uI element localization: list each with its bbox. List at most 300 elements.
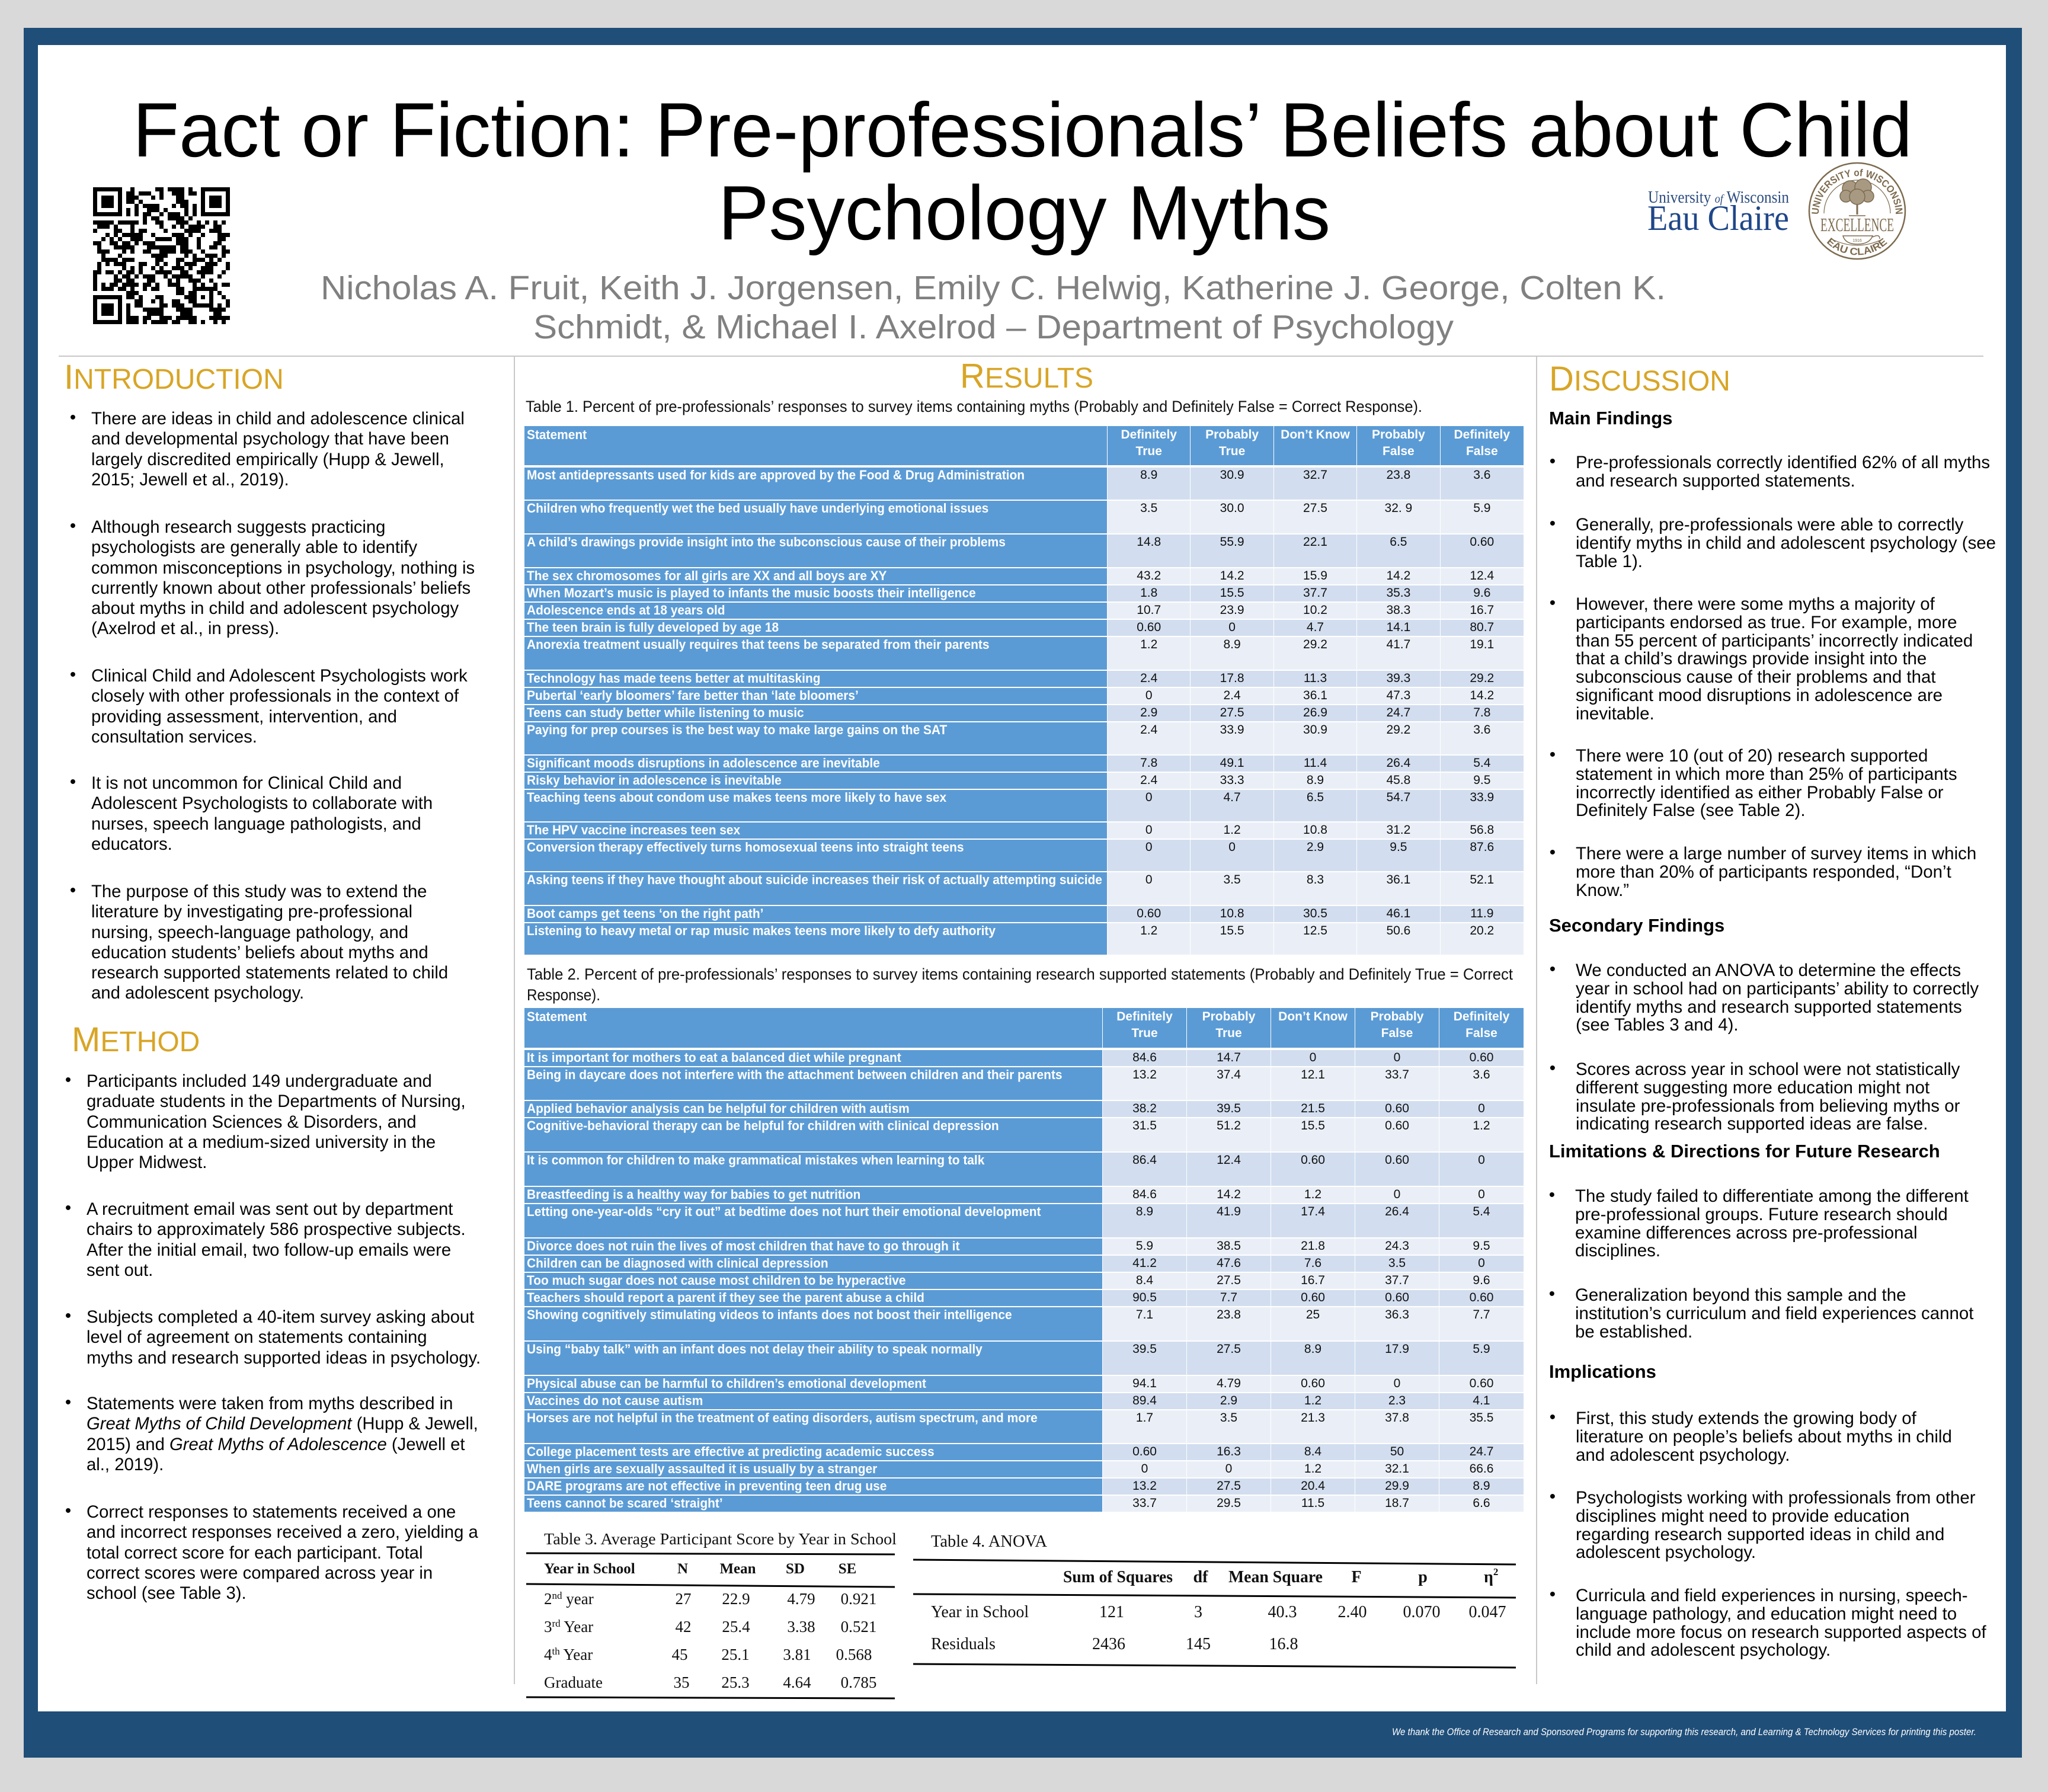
bullet: curricula: child and adolescent psychology. <box>1576 1640 1831 1660</box>
table 2: research supported statements: 38.5 <box>1217 1239 1241 1253</box>
table 2: research supported statements: It is important for mothers to eat a balanced diet while pregnant <box>527 1050 901 1065</box>
bullet: curricula: include more focus on research supported aspects of <box>1576 1623 1986 1642</box>
bullet: generalization: be established. <box>1575 1322 1692 1342</box>
table 2: research supported statements: Too much sugar does not cause most children to be hyperactive <box>527 1273 906 1288</box>
table 2: research supported statements: 27.5 <box>1217 1273 1241 1287</box>
logo: University of Wisconsin Eau Claire wordmark: University of Wisconsin <box>1648 188 1789 207</box>
bullet: endorsed myths: inevitable. <box>1576 704 1655 724</box>
bullet: collaboration <box>91 773 433 855</box>
table 2: research supported statements: 3.6 <box>1473 1068 1490 1081</box>
table 1: myths: 50.6 <box>1386 924 1410 937</box>
table 1: myths: 1.2 <box>1223 823 1241 837</box>
table 3: average participant score by year in school: Graduate <box>544 1673 603 1691</box>
table 1: myths: 1.2 <box>1140 924 1157 937</box>
bullet: survey: level of agreement on statements containing <box>87 1327 427 1347</box>
table 1: myths: 30.9 <box>1303 723 1327 737</box>
bullet: supported statements: statement in which more than 25% of participants <box>1576 764 1957 784</box>
title: Fact or Fiction: Pre-professionals’ Beliefs about Child <box>133 87 1912 173</box>
table 2: research supported statements: 21.5 <box>1301 1102 1325 1115</box>
table 2: research supported statements: 16.3 <box>1217 1445 1241 1458</box>
table 2: research supported statements: 11.5 <box>1301 1496 1324 1510</box>
table 2: research supported statements: Breastfeeding is a healthy way for babies to get nutrition <box>527 1187 860 1202</box>
bullet: statement sources: Great Myths of Child Development (Hupp & Jewell, <box>87 1414 478 1433</box>
bullet: supported statements: There were 10 (out of 20) research supported <box>1576 746 1928 766</box>
table 1: myths: 22.1 <box>1303 535 1327 549</box>
table 1: myths: 17.8 <box>1220 671 1244 685</box>
table 1: myths: 14.2 <box>1220 569 1244 583</box>
panel: method <box>66 1020 481 1603</box>
table 1: myths: 49.1 <box>1220 756 1244 770</box>
table 3: average participant score by year in school: Table 3. Average Participant Score by Year in School <box>544 1530 897 1548</box>
table 1: myths: 3.6 <box>1473 468 1490 482</box>
table 1: myths: Asking teens if they have thought about suicide increases their risk of actually attempting suicide <box>527 872 1102 887</box>
table 2: research supported statements: 0 <box>1225 1462 1232 1476</box>
table 3: average participant score by year in school: year <box>562 1590 594 1608</box>
table 1: myths: 9.5 <box>1473 773 1490 787</box>
table 1: myths: 87.6 <box>1470 840 1494 854</box>
table 1: myths: 15.5 <box>1220 924 1244 937</box>
table 1: myths: 2.4 <box>1140 773 1157 787</box>
table 1: myths: 2.9 <box>1307 840 1324 854</box>
table 3: average participant score by year in school: 22.9 <box>722 1590 750 1608</box>
table 2: research supported statements: Teens cannot be scared ‘straight’ <box>527 1496 723 1511</box>
table 1: myths: 0.60 <box>1137 620 1161 634</box>
bullet: 62 percent: Pre-professionals correctly identified 62% of all myths <box>1576 453 1990 472</box>
bullet: participants: Communication Sciences & Disorders, and <box>87 1112 417 1132</box>
bullet: don't know responses: more than 20% of participants responded, “Don’t <box>1576 862 1951 882</box>
icon: university seal: EAU CLAIRE <box>1826 238 1887 255</box>
table 1: myths: 19.1 <box>1470 638 1494 651</box>
table 3: average participant score by year in school: 25.3 <box>721 1673 750 1691</box>
bullet: psychologists provide education: regarding research supported ideas in child and <box>1576 1525 1944 1544</box>
table 1: myths: 0 <box>1145 823 1153 837</box>
table 3: average participant score by year in school: 3.38 <box>787 1618 815 1636</box>
tree crown and trunk <box>1840 179 1874 216</box>
table 2: research supported statements: Probably <box>1371 1010 1423 1023</box>
bullet: participants: Participants included 149 undergraduate and <box>87 1071 432 1091</box>
bullet: participants <box>87 1071 466 1173</box>
table 1: myths: 31.2 <box>1386 823 1410 837</box>
bullet: recruitment: chairs to approximately 586 prospective subjects. <box>87 1220 466 1239</box>
table 1: myths: 2.9 <box>1140 706 1157 719</box>
table 2: research supported statements: 0 <box>1478 1256 1485 1270</box>
table 2: research supported statements <box>524 1008 1524 1512</box>
table 2: research supported statements: 0.60 <box>1301 1377 1325 1390</box>
table 3: average participant score by year in school: 35 <box>673 1673 690 1691</box>
table 2: research supported statements: 1.7 <box>1136 1411 1153 1425</box>
table 1: myths: 15.5 <box>1220 586 1244 600</box>
bullet: recruitment: A recruitment email was sent out by department <box>87 1199 453 1219</box>
table 1: myths: 0 <box>1145 791 1153 804</box>
table 2: research supported statements: Cognitive-behavioral therapy can be helpful for children with clinical depression <box>527 1118 999 1133</box>
bullet: year in school scores: insulate pre-professionals from believing myths or <box>1576 1096 1960 1116</box>
bullet: participants: graduate students in the Departments of Nursing, <box>87 1092 466 1111</box>
table 2: research supported statements: 8.4 <box>1136 1273 1153 1287</box>
bullet: collaboration: educators. <box>91 834 172 854</box>
table 2: research supported statements: 29.5 <box>1217 1496 1241 1510</box>
table 1: myths: 33.9 <box>1470 791 1494 804</box>
bullet: correctly identify myths: identify myths in child and adolescent psychology (see <box>1576 533 1996 553</box>
bullet: endorsed myths: participants endorsed as true. For example, more <box>1576 613 1957 632</box>
table 1: myths: 11.3 <box>1304 671 1327 685</box>
table 2: research supported statements: 12.4 <box>1217 1153 1241 1167</box>
table 2: research supported statements: 13.2 <box>1132 1479 1157 1493</box>
table 2: research supported statements: 0.60 <box>1132 1445 1157 1458</box>
table 1: myths: 2.4 <box>1140 671 1157 685</box>
bullet: discredited ideas <box>91 409 465 490</box>
table 2: research supported statements: 14.7 <box>1217 1051 1241 1064</box>
table 2: research supported statements: 1.2 <box>1304 1462 1321 1476</box>
table 2: research supported statements: Being in daycare does not interfere with the attachment between children and their parents <box>527 1067 1063 1082</box>
bullet: endorsed myths: However, there were some myths a majority of <box>1576 594 1935 614</box>
table 2: research supported statements: 39.5 <box>1217 1102 1241 1115</box>
table 1: myths <box>524 426 1524 955</box>
table 2: research supported statements: Applied behavior analysis can be helpful for children with autism <box>527 1101 910 1116</box>
table 2: research supported statements: 0 <box>1141 1462 1148 1476</box>
bullet: practicing psychologists: currently known about other professionals’ beliefs <box>91 578 471 598</box>
bullet: 62 percent: and research supported statements. <box>1576 471 1855 491</box>
bullet: pre-professional groups: The study failed to differentiate among the different <box>1575 1186 1969 1206</box>
table 2: research supported statements: 8.9 <box>1304 1342 1321 1356</box>
table 1: myths: True <box>1219 444 1245 458</box>
table 1: myths: 0.60 <box>1470 535 1494 549</box>
bullet: curricula: Curricula and field experiences in nursing, speech- <box>1576 1586 1968 1605</box>
table 3: average participant score by year in school: N <box>677 1561 688 1577</box>
table 2: research supported statements: 0.60 <box>1385 1291 1409 1304</box>
bullet: clinical child psychologists <box>91 666 468 747</box>
table 1: myths: 26.4 <box>1386 756 1410 770</box>
bullet: psychologists provide education <box>1576 1489 1976 1562</box>
bullet: 62 percent <box>1576 454 1990 491</box>
bullet: year in school scores: different suggesting more education might not <box>1576 1078 1929 1097</box>
table 2: research supported statements: 37.8 <box>1385 1411 1409 1425</box>
table 1: myths: Paying for prep courses is the best way to make large gains on the SAT <box>527 722 947 737</box>
table 4: ANOVA: Table 4. ANOVA <box>931 1532 1048 1551</box>
bullet: collaboration: It is not uncommon for Clinical Child and <box>91 773 402 793</box>
bullet: year in school scores: Scores across year in school were not statistically <box>1576 1060 1960 1079</box>
table 4: ANOVA: 2 <box>1493 1566 1498 1577</box>
bullet: endorsed myths: significant mood disruptions in adolescence are <box>1576 686 1943 705</box>
table 1: myths: 24.7 <box>1386 706 1410 719</box>
bullet: practicing psychologists: Although research suggests practicing <box>91 517 385 537</box>
table 1: myths: 12.5 <box>1303 924 1327 937</box>
bullet: endorsed myths: that a child’s drawings provide insight into the <box>1576 649 1927 668</box>
bullet: supported statements: Definitely False (see Table 2). <box>1576 801 1806 820</box>
bullet: statement sources: 2015) and Great Myths of Adolescence (Jewell et <box>87 1435 465 1454</box>
table 2: research supported statements: 33.7 <box>1132 1496 1157 1510</box>
table 2: research supported statements: 5.9 <box>1473 1342 1490 1356</box>
table 2: research supported statements: 9.6 <box>1473 1273 1490 1287</box>
table 2: research supported statements: Showing cognitively stimulating videos to infants does not boost their intelligence <box>527 1307 1012 1322</box>
bullet: collaboration: Adolescent Psychologists to collaborate with <box>91 793 433 813</box>
table 2: research supported statements: Vaccines do not cause autism <box>527 1393 703 1408</box>
table 2: research supported statements: 27.5 <box>1217 1479 1241 1493</box>
table 1: myths: 8.9 <box>1140 468 1157 482</box>
table 2: research supported statements: 8.9 <box>1136 1205 1153 1218</box>
table 1: myths: 2.4 <box>1140 723 1157 737</box>
bullet: pre-professional groups: pre-professional groups. Future research should <box>1575 1205 1948 1224</box>
table 2: research supported statements: 0.60 <box>1470 1291 1493 1304</box>
table 2: research supported statements: False <box>1465 1026 1497 1040</box>
bullet: purpose: education students’ beliefs about myths and <box>91 943 428 962</box>
table 2: research supported statements: Definitely <box>1116 1010 1173 1023</box>
table 2: research supported statements: 24.7 <box>1470 1445 1493 1458</box>
bullet: generalization <box>1575 1287 1974 1341</box>
table 1: myths: Most antidepressants used for kids are approved by the Food & Drug Administration <box>527 468 1025 482</box>
panel: results <box>524 357 1524 1700</box>
table 1: myths: A child’s drawings provide insight into the subconscious cause of their problems <box>527 535 1006 549</box>
table 1: myths: 29.2 <box>1386 723 1410 737</box>
table 1: myths: Definitely <box>1121 428 1177 441</box>
bullet: clinical child psychologists: providing assessment, intervention, and <box>91 707 397 727</box>
table 2: research supported statements: When girls are sexually assaulted it is usually by a stranger <box>527 1461 877 1476</box>
table 1: myths: Statement <box>527 427 587 442</box>
table 1: myths: The sex chromosomes for all girls are XX and all boys are XY <box>527 568 887 583</box>
table 2: research supported statements: 0 <box>1310 1051 1316 1064</box>
table 3: average participant score by year in school: 0.521 <box>841 1618 876 1636</box>
table 2: research supported statements: 23.8 <box>1217 1308 1241 1321</box>
bullet: practicing psychologists: psychologists are generally able to identify <box>91 537 417 557</box>
table 2: research supported statements: 51.2 <box>1217 1119 1241 1132</box>
panel: introduction <box>64 358 475 1003</box>
table 2: research supported statements: 38.2 <box>1132 1102 1157 1115</box>
table 2: research supported statements: 8.4 <box>1304 1445 1321 1458</box>
table 3: average participant score by year in school: 42 <box>676 1618 691 1636</box>
table 1: myths: 3.5 <box>1140 501 1157 515</box>
bullet: discredited ideas: 2015; Jewell et al., 2019). <box>91 470 289 489</box>
table 1: myths: Listening to heavy metal or rap music makes teens more likely to defy authority <box>527 923 996 938</box>
heading: Method: METHOD <box>72 1020 200 1059</box>
lamp of knowledge <box>1843 236 1880 244</box>
table 4: ANOVA: 145 <box>1186 1635 1211 1653</box>
table 2: research supported statements: 7.1 <box>1136 1308 1153 1321</box>
table 2: research supported statements: 94.1 <box>1132 1377 1157 1390</box>
bullet: extends literature: and adolescent psychology. <box>1576 1445 1790 1465</box>
table 1: myths: Risky behavior in adolescence is inevitable <box>527 773 782 788</box>
logo: University of Wisconsin Eau Claire wordmark: Eau Claire <box>1647 199 1789 238</box>
table 3: average participant score by year in school: Year <box>561 1618 593 1636</box>
table 3: average participant score by year in school: 0.785 <box>841 1673 876 1691</box>
panel: discussion <box>1549 360 1996 1660</box>
table 1: myths: 37.7 <box>1303 586 1327 600</box>
bullet: purpose <box>91 882 448 1004</box>
bullet: purpose: and adolescent psychology. <box>91 983 304 1003</box>
table 1: myths: 1.8 <box>1140 586 1157 600</box>
table 3: average participant score by year in school: 3.81 <box>783 1646 811 1663</box>
bullet: correctly identify myths: Generally, pre-professionals were able to correctly <box>1576 515 1963 535</box>
table 2: research supported statements: 37.7 <box>1385 1273 1409 1287</box>
table 1: myths: 0.60 <box>1137 907 1161 920</box>
bullet: year in school scores <box>1576 1061 1960 1134</box>
table 1: myths: 14.2 <box>1470 689 1494 702</box>
icon: university seal: UNIVERSITY of WISCONSIN <box>1812 169 1903 215</box>
table 1: myths: 10.7 <box>1137 603 1161 617</box>
table 1: myths: 0 <box>1145 689 1153 702</box>
table 3: average participant score by year in school: nd <box>552 1590 562 1601</box>
table 1: myths: 0 <box>1145 840 1153 854</box>
bullet: purpose: literature by investigating pre-professional <box>91 902 412 921</box>
bullet: scoring: total correct score for each participant. Total <box>87 1543 423 1563</box>
table 1: myths: The teen brain is fully developed by age 18 <box>527 620 779 635</box>
table 2: research supported statements: 27.5 <box>1217 1342 1241 1356</box>
table 2: research supported statements: 24.3 <box>1385 1239 1409 1253</box>
table 2: research supported statements: 0.60 <box>1470 1051 1493 1064</box>
bullet: purpose: The purpose of this study was to extend the <box>91 882 427 901</box>
table 2: research supported statements: 66.6 <box>1470 1462 1493 1476</box>
table 1: myths: Teaching teens about condom use makes teens more likely to have sex <box>527 790 946 805</box>
heading: Discussion: DISCUSSION <box>1549 360 1730 398</box>
bullet: pre-professional groups: examine differences across pre-professional <box>1575 1223 1917 1243</box>
table 1: myths: 80.7 <box>1470 620 1494 634</box>
icon: university seal: EXCELLENCE <box>1820 214 1894 235</box>
table 1: myths: 8.9 <box>1307 773 1324 787</box>
table 4: ANOVA: 0.070 <box>1403 1603 1440 1621</box>
bullet: recruitment <box>87 1199 466 1281</box>
table 1: myths: 9.5 <box>1390 840 1407 854</box>
table 1: myths: The HPV vaccine increases teen sex <box>527 823 740 837</box>
bullet: extends literature <box>1576 1410 1952 1464</box>
table 1: myths: Teens can study better while listening to music <box>527 705 804 720</box>
table 4: ANOVA: Year in School <box>931 1603 1029 1621</box>
table 2: research supported statements: Teachers should report a parent if they see the parent abuse a child <box>527 1290 924 1305</box>
table 2: research supported statements: 0 <box>1394 1051 1400 1064</box>
table 2: research supported statements: 9.5 <box>1473 1239 1490 1253</box>
table 3: average participant score by year in school: 45 <box>672 1646 687 1663</box>
table 1: myths: 30.0 <box>1220 501 1244 515</box>
table 1: myths: Technology has made teens better at multitasking <box>527 671 821 686</box>
table 2: research supported statements: Children can be diagnosed with clinical depression <box>527 1256 828 1271</box>
table 1: myths: 9.6 <box>1473 586 1490 600</box>
table 1: myths: 36.1 <box>1386 873 1410 887</box>
table 1: myths: 7.8 <box>1140 756 1157 770</box>
table 3: average participant score by year in school: 4 <box>544 1646 552 1663</box>
table 1: myths: 39.3 <box>1386 671 1410 685</box>
title: Psychology Myths <box>718 169 1330 256</box>
table 1: myths: 55.9 <box>1220 535 1244 549</box>
table 2: research supported statements: Letting one-year-olds “cry it out” at bedtime does not hurt their emotional development <box>527 1204 1041 1219</box>
table 4: ANOVA: df <box>1193 1568 1208 1586</box>
bullet: practicing psychologists: (Axelrod et al., in press). <box>91 619 279 638</box>
table 2: research supported statements: True <box>1131 1026 1158 1040</box>
table 1: myths: 12.4 <box>1470 569 1494 583</box>
table 1: myths: 4.7 <box>1223 791 1241 804</box>
table 4: ANOVA: 2.40 <box>1338 1603 1367 1621</box>
bullet: ANOVA: identify myths and research supported statements <box>1576 997 1962 1017</box>
table 2: research supported statements: 86.4 <box>1132 1153 1157 1167</box>
bullet: ANOVA <box>1576 962 1979 1035</box>
bullet: correctly identify myths: Table 1). <box>1576 552 1643 571</box>
table 1: myths: 30.5 <box>1303 907 1327 920</box>
table 2: research supported statements: 15.5 <box>1301 1119 1325 1132</box>
table 4: ANOVA: Sum of Squares <box>1063 1568 1173 1586</box>
table 2 caption: Response). <box>527 986 600 1004</box>
table 1: myths: 54.7 <box>1386 791 1410 804</box>
table 1: myths: Significant moods disruptions in adolescence are inevitable <box>527 756 880 770</box>
table 3: average participant score by year in school: SD <box>786 1561 805 1577</box>
table 1: myths: Definitely <box>1454 428 1510 441</box>
table 1: myths: 56.8 <box>1470 823 1494 837</box>
table 1: myths: 4.7 <box>1307 620 1324 634</box>
table 1: myths: 20.2 <box>1470 924 1494 937</box>
bullet: pre-professional groups: disciplines. <box>1575 1241 1660 1260</box>
table 1: myths: 3.5 <box>1223 873 1241 887</box>
table 4: ANOVA: 3 <box>1194 1603 1202 1621</box>
table 1: myths: 1.2 <box>1140 638 1157 651</box>
table 1: myths: When Mozart’s music is played to infants the music boosts their intelligence <box>527 585 976 600</box>
table 1: myths: 14.1 <box>1386 620 1410 634</box>
table 1: myths: False <box>1466 444 1498 458</box>
table 1 caption: Table 1. Percent of pre-professionals’ responses to survey items containing myths (Probably and Definitely False = Correct Response). <box>526 398 1422 415</box>
table 3: average participant score by year in school: 4.79 <box>787 1590 815 1608</box>
bullet: psychologists provide education: Psychologists working with professionals from other <box>1576 1488 1976 1508</box>
bullet: statement sources: al., 2019). <box>87 1455 164 1474</box>
table 1: myths: Probably <box>1205 428 1259 441</box>
bullet: generalization: institution’s curriculum and field experiences cannot <box>1575 1304 1974 1323</box>
table 2: research supported statements: 0.60 <box>1385 1153 1409 1167</box>
bullet: extends literature: First, this study extends the growing body of <box>1576 1409 1916 1428</box>
table 1: myths: 14.2 <box>1386 569 1410 583</box>
table 1: myths: 26.9 <box>1303 706 1327 719</box>
table 2: research supported statements: 36.3 <box>1385 1308 1409 1321</box>
table 2: research supported statements: 4.1 <box>1473 1394 1490 1407</box>
bullet: survey: Subjects completed a 40-item survey asking about <box>87 1307 474 1327</box>
table 2: research supported statements: 17.4 <box>1301 1205 1325 1218</box>
table 3: average participant score by year in school: th <box>552 1646 560 1657</box>
table 2: research supported statements: 39.5 <box>1132 1342 1157 1356</box>
table 1: myths: 11.4 <box>1304 756 1327 770</box>
bullet: practicing psychologists: common misconceptions in psychology, nothing is <box>91 558 475 578</box>
table 1: myths: Pubertal ‘early bloomers’ fare better than ‘late bloomers’ <box>527 688 859 703</box>
bullet: year in school scores: indicating research supported ideas are false. <box>1576 1114 1928 1134</box>
bullet: discredited ideas: and developmental psychology that have been <box>91 429 449 449</box>
table 1: myths: 29.2 <box>1303 638 1327 651</box>
table 4: ANOVA: 121 <box>1099 1603 1124 1621</box>
bullet: statement sources <box>87 1394 478 1475</box>
table 2: research supported statements: Definitely <box>1454 1010 1509 1023</box>
title <box>133 87 1912 256</box>
QR code <box>93 190 230 322</box>
table 2: research supported statements: Physical abuse can be harmful to children’s emotional development <box>527 1376 926 1391</box>
table 1: myths: 23.8 <box>1386 468 1410 482</box>
table 1: myths: 36.1 <box>1303 689 1327 702</box>
table 2: research supported statements: 16.7 <box>1301 1273 1325 1287</box>
table 3: average participant score by year in school: Year <box>560 1646 593 1663</box>
table 2: research supported statements: 31.5 <box>1132 1119 1157 1132</box>
table 4: ANOVA: 2436 <box>1092 1635 1125 1653</box>
table 2: research supported statements: 14.2 <box>1217 1188 1241 1201</box>
table 1: myths: True <box>1136 444 1162 458</box>
table 1: myths: 32.7 <box>1303 468 1327 482</box>
table 2: research supported statements: 0 <box>1478 1188 1485 1201</box>
table 2: research supported statements: Divorce does not ruin the lives of most children that have to go through it <box>527 1239 959 1253</box>
table 3: average participant score by year in school: 2 <box>544 1590 552 1608</box>
table 2: research supported statements: 20.4 <box>1301 1479 1325 1493</box>
table 2: research supported statements: 3.5 <box>1388 1256 1406 1270</box>
table 2: research supported statements: 1.2 <box>1304 1188 1321 1201</box>
table 1: myths: False <box>1383 444 1415 458</box>
bullet: collaboration: nurses, speech language pathologists, and <box>91 814 421 834</box>
table 1: myths: 29.2 <box>1470 671 1494 685</box>
table 2: research supported statements: 37.4 <box>1217 1068 1241 1081</box>
bullet: recruitment: sent out. <box>87 1260 153 1280</box>
bullet: extends literature: literature on people’s beliefs about myths in child <box>1576 1427 1952 1447</box>
table 2: research supported statements: 5.9 <box>1136 1239 1153 1253</box>
bullet: survey <box>87 1307 481 1368</box>
bullet: recruitment: After the initial email, two follow-up emails were <box>87 1240 451 1260</box>
bullet: psychologists provide education: disciplines might need to provide education <box>1576 1506 1909 1526</box>
table 1: myths: 45.8 <box>1386 773 1410 787</box>
table 1: myths: 16.7 <box>1470 603 1494 617</box>
